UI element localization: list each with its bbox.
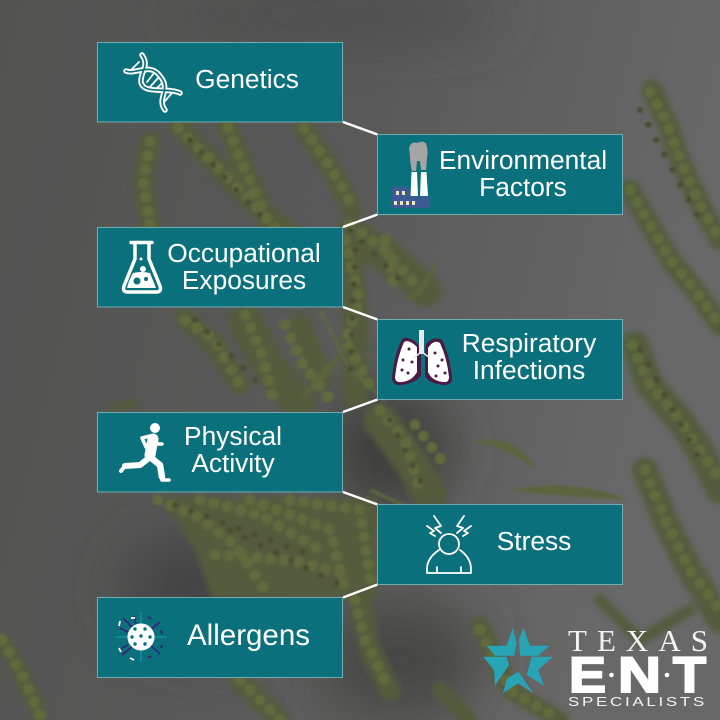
label: respiratory infections: Respiratory (462, 328, 596, 358)
icon: lungs (392, 330, 452, 385)
logo: texas ent specialists (483, 623, 708, 709)
label: respiratory infections: Infections (473, 355, 585, 385)
panel: stress (378, 504, 622, 584)
wordmark: specialists: SPECIALISTS (568, 695, 707, 709)
label: occupational exposures: Occupational (167, 238, 321, 268)
wordmark: ent: N (618, 647, 661, 703)
panel: genetics (98, 42, 342, 122)
icon: factory (391, 142, 430, 208)
panel: environmental factors (378, 134, 622, 214)
label: allergens: Allergens (187, 619, 310, 652)
connector lines (343, 122, 378, 598)
wordmark: texas: TEXAS (568, 623, 708, 658)
panel: occupational exposures (98, 228, 342, 307)
label: environmental factors: Factors (479, 172, 567, 202)
panel: physical activity (98, 412, 342, 492)
panel: respiratory infections (378, 320, 622, 400)
icon: star (483, 628, 553, 693)
panel: allergens (98, 598, 342, 678)
label: genetics: Genetics (195, 64, 299, 94)
label: stress: Stress (497, 526, 571, 556)
wordmark: ent: T (673, 647, 706, 703)
wordmark: ent (569, 647, 706, 703)
icon: flask (124, 242, 160, 292)
icon: dna helix (126, 55, 180, 110)
label: physical activity: Activity (191, 448, 275, 478)
label: environmental factors: Environmental (439, 145, 607, 175)
icon: allergen particle (116, 612, 167, 662)
label: physical activity: Physical (184, 421, 282, 451)
wordmark: ent: E (569, 647, 606, 703)
label: occupational exposures: Exposures (182, 265, 306, 295)
icon: runner (121, 423, 169, 480)
icon: stressed person (427, 516, 471, 573)
